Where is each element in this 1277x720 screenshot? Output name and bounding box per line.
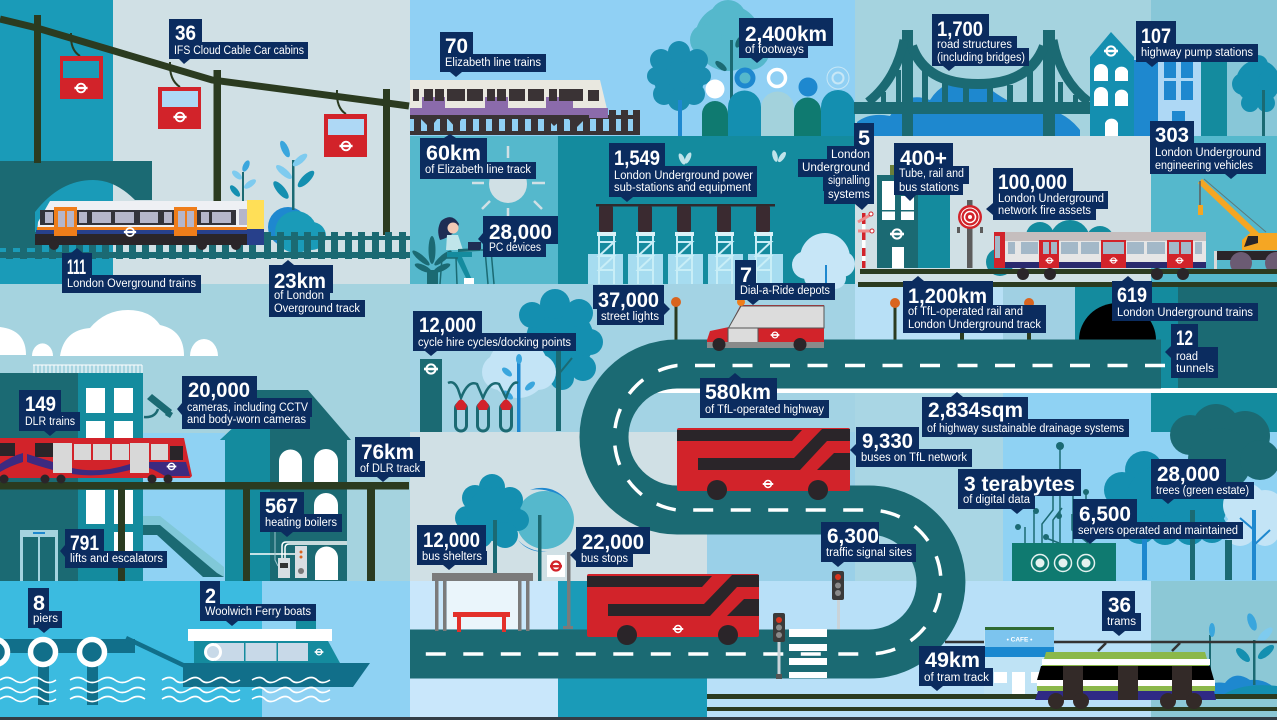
icon: London Overground train bbox=[35, 200, 264, 250]
callout: 23km overground track bbox=[269, 260, 365, 317]
winding road bbox=[410, 364, 1165, 654]
callout: 12 road tunnels: tunnels bbox=[1176, 363, 1214, 375]
callout: 22,000 bus stops: 22,000 bbox=[582, 531, 644, 554]
callout: 2,400km footways: 2,400km bbox=[745, 23, 827, 46]
callout: 111 overground trains: 111 bbox=[67, 256, 86, 279]
callout: 107 highway pump stations bbox=[1136, 21, 1258, 67]
callout: 60km Elizabeth track: of Elizabeth line track bbox=[425, 164, 531, 176]
callout: 1,549 power sub-stations: sub-stations and equipment bbox=[614, 182, 752, 194]
icon: Underground train bbox=[994, 232, 1206, 268]
callout: 400+ stations bbox=[894, 143, 969, 201]
icon: fire hose reel bbox=[957, 200, 983, 268]
callout: 1,700 road structures bbox=[932, 14, 1029, 71]
callout: 7 Dial-a-Ride depots: Dial-a-Ride depots bbox=[740, 285, 830, 297]
icon: plants at tram end bbox=[1200, 612, 1277, 697]
callout: 76km DLR track: 76km bbox=[361, 441, 414, 464]
callout: 22,000 bus stops: bus stops bbox=[581, 553, 628, 565]
callout: 619 Underground trains: London Underground trains bbox=[1117, 307, 1253, 319]
icon: bus shelter bbox=[432, 573, 533, 632]
callout: 70 Elizabeth line trains: Elizabeth line trains bbox=[445, 57, 541, 69]
callout: 5 signalling systems: signalling bbox=[828, 175, 870, 187]
DLR viaduct bbox=[0, 482, 409, 581]
icon: lift bbox=[20, 530, 58, 581]
callout: 1,549 power sub-stations: 1,549 bbox=[614, 147, 660, 170]
callout: 12,000 bus shelters: bus shelters bbox=[422, 551, 482, 563]
icon: cafe building bbox=[984, 627, 1054, 695]
icon: footways trees and people bbox=[647, 0, 855, 136]
callout: 2 Woolwich Ferry boats: Woolwich Ferry boats bbox=[205, 606, 311, 618]
tram rails bbox=[707, 694, 1277, 711]
callout: 5 signalling systems: Underground bbox=[802, 162, 870, 174]
callout: 36 cable car cabins bbox=[169, 19, 308, 64]
icon: suspension bridge bbox=[854, 30, 1090, 136]
callout: 8 piers bbox=[28, 588, 62, 633]
callout: 28,000 trees: 28,000 bbox=[1157, 463, 1220, 486]
callout: 28,000 PC devices: 28,000 bbox=[489, 221, 552, 244]
callout: 2,834sqm drainage: of highway sustainable drainage systems bbox=[927, 423, 1124, 435]
callout: 5 signalling systems: 5 bbox=[858, 127, 870, 150]
icon: traffic light at junction bbox=[832, 571, 844, 629]
callout: 12,000 cycle hire: cycle hire cycles/docking points bbox=[418, 337, 571, 349]
icon: cable car cabin 1 bbox=[60, 33, 103, 99]
callout: 49km tram track: 49km bbox=[925, 649, 980, 672]
callout: 567 heating boilers: 567 bbox=[265, 495, 298, 518]
icon: green estate trees bbox=[1102, 404, 1277, 580]
icon: clouds bbox=[0, 310, 218, 356]
callout: 12 road tunnels: road bbox=[1176, 351, 1198, 363]
callout: 567 heating boilers: heating boilers bbox=[265, 517, 337, 529]
callout: 6,500 servers: 6,500 bbox=[1079, 503, 1131, 526]
icon: bushes behind tube train bbox=[986, 220, 1114, 276]
callout: 60km Elizabeth track bbox=[420, 134, 536, 179]
callout: 1,200km track: London Underground track bbox=[908, 319, 1041, 331]
callout: 37,000 street lights bbox=[593, 285, 670, 325]
callout: 28,000 PC devices: PC devices bbox=[489, 242, 541, 254]
callout: 12,000 bus shelters bbox=[417, 525, 487, 570]
icon: overhead tram wire bbox=[945, 642, 1277, 651]
callout: 76km DLR track bbox=[355, 437, 425, 482]
callout: 580km highway: 580km bbox=[705, 381, 771, 404]
callout: 12 road tunnels bbox=[1165, 324, 1218, 378]
callout: 580km highway: of TfL-operated highway bbox=[705, 404, 824, 416]
callout: 149 DLR trains: 149 bbox=[25, 393, 56, 416]
icon: traffic light near crossing bbox=[773, 613, 785, 679]
callout: 9,330 buses: buses on TfL network bbox=[861, 452, 967, 464]
callout: 2,400km footways: of footways bbox=[745, 44, 804, 56]
callout: 3 terabytes: of digital data bbox=[963, 494, 1031, 506]
callout: 619 Underground trains: 619 bbox=[1117, 284, 1147, 307]
icon: plants and bush beside overground bbox=[228, 139, 326, 253]
callout: 6,500 servers bbox=[1073, 499, 1243, 544]
callout: 791 lifts and escalators bbox=[60, 529, 167, 568]
callout: 791 lifts and escalators: lifts and escalators bbox=[70, 553, 163, 565]
icon: servers with circuit lines bbox=[1012, 442, 1116, 581]
callout: 111 overground trains: London Overground trains bbox=[67, 278, 196, 290]
icon: double-decker bus on TfL network bbox=[677, 428, 850, 500]
callout: 2 Woolwich Ferry boats: 2 bbox=[205, 585, 216, 608]
callout: 6,300 traffic signals bbox=[821, 522, 916, 567]
callout: 28,000 trees: trees (green estate) bbox=[1156, 485, 1249, 497]
callout: 36 trams: 36 bbox=[1108, 594, 1131, 617]
callout: 580km highway bbox=[700, 373, 829, 418]
icon: DLR tower building bbox=[0, 365, 143, 581]
callout: 1,700 road structures: 1,700 bbox=[937, 18, 983, 41]
callout: 3 terabytes bbox=[958, 469, 1081, 514]
icon: townhouses beside pump stations bbox=[1090, 29, 1277, 136]
icon: bus stop pole and sign bbox=[547, 552, 573, 629]
icon: cable car cabin 3 bbox=[324, 90, 367, 157]
icon: house with arched windows bbox=[220, 390, 351, 581]
callout: 6,500 servers: servers operated and maintained bbox=[1078, 525, 1238, 537]
cable car line with towers bbox=[0, 15, 409, 235]
icon: crane bbox=[1198, 179, 1277, 274]
callout: 1,200km track: of TfL-operated rail and bbox=[908, 306, 1023, 318]
icon: Woolwich ferry bbox=[183, 621, 370, 687]
callout: 60km Elizabeth track: 60km bbox=[426, 142, 481, 165]
callout: 23km overground track: 23km bbox=[274, 270, 326, 293]
callout: 23km overground track: Overground track bbox=[274, 303, 360, 315]
callout: 22,000 bus stops bbox=[570, 527, 650, 567]
callout: 20,000 cameras bbox=[177, 376, 312, 429]
callout: 1,700 road structures: (including bridges) bbox=[937, 52, 1025, 64]
callout: 2 Woolwich Ferry boats bbox=[200, 581, 316, 626]
callout: 8 piers: 8 bbox=[33, 592, 45, 615]
white kerb highlight bbox=[655, 388, 1277, 393]
callout: 100,000 fire assets: network fire assets bbox=[998, 205, 1091, 217]
callout: 49km tram track: of tram track bbox=[924, 672, 989, 684]
icon: waves bbox=[0, 678, 330, 702]
callout: 12 road tunnels: 12 bbox=[1176, 327, 1193, 350]
callout: 107 highway pump stations: highway pump stations bbox=[1141, 47, 1253, 59]
callout: 9,330 buses bbox=[850, 427, 972, 467]
icon: railway arch bridge bbox=[0, 161, 152, 248]
callout: 36 cable car cabins: IFS Cloud Cable Car cabins bbox=[174, 45, 304, 57]
callout: 5 signalling systems: London bbox=[831, 149, 870, 161]
callout: 2,400km footways bbox=[739, 18, 833, 63]
icon: CCTV camera bbox=[144, 394, 173, 418]
callout: 5 signalling systems bbox=[798, 123, 874, 210]
callout: 20,000 cameras: 20,000 bbox=[188, 379, 250, 402]
callout: 12,000 bus shelters: 12,000 bbox=[423, 529, 480, 552]
callout: 1,200km track bbox=[903, 276, 1046, 333]
icon: street lights bbox=[671, 297, 1034, 340]
icon: zebra crossing bbox=[789, 629, 827, 678]
callout: 5 signalling systems: systems bbox=[828, 189, 870, 201]
icon: light shrub at end of sub-station panel bbox=[792, 233, 855, 289]
icon: signal post bbox=[858, 212, 874, 268]
rail line under tube train bbox=[858, 269, 1277, 287]
callout: 400+ stations: bus stations bbox=[899, 182, 959, 194]
icon: tube train wheels bbox=[1017, 268, 1189, 280]
callout: 23km overground track: of London bbox=[274, 290, 324, 302]
icon: escalator bbox=[143, 516, 224, 577]
icon: Dial-a-Ride van bbox=[707, 298, 824, 351]
callout: 567 heating boilers bbox=[260, 492, 342, 537]
icon: cycle hire trees bbox=[482, 289, 603, 432]
callout: 20,000 cameras: and body-worn cameras bbox=[187, 414, 306, 426]
callout: 37,000 street lights: 37,000 bbox=[598, 289, 659, 312]
icon: cable car cabin 2 bbox=[158, 62, 201, 129]
callout: 37,000 street lights: street lights bbox=[601, 311, 659, 323]
callout: 2,834sqm drainage bbox=[922, 392, 1129, 437]
callout: 400+ stations: 400+ bbox=[900, 147, 947, 170]
icon: tram bbox=[1035, 652, 1216, 709]
icon: heating boiler pipes bbox=[249, 532, 347, 578]
callout: 70 Elizabeth line trains: 70 bbox=[445, 35, 468, 58]
icon: trees behind bus shelter bbox=[455, 474, 574, 581]
callout: 1,549 power sub-stations bbox=[609, 143, 757, 202]
callout: 303 engineering vehicles: London Underground bbox=[1155, 147, 1261, 159]
callout: 49km tram track bbox=[919, 646, 993, 691]
callout: 149 DLR trains bbox=[19, 390, 80, 436]
icon: cafe building: • CAFE • bbox=[1007, 636, 1033, 644]
callout: 20,000 cameras: cameras, including CCTV bbox=[187, 402, 308, 414]
callout: 100,000 fire assets bbox=[986, 168, 1108, 220]
icon: station building bbox=[877, 165, 950, 268]
callout: 107 highway pump stations: 107 bbox=[1141, 25, 1171, 48]
callout: 400+ stations: Tube, rail and bbox=[899, 168, 964, 180]
icon: power sub-stations bbox=[588, 150, 787, 284]
callout: 111 overground trains bbox=[62, 248, 201, 293]
callout: 303 engineering vehicles bbox=[1150, 121, 1266, 179]
callout: 28,000 trees bbox=[1151, 459, 1254, 504]
callout: 791 lifts and escalators: 791 bbox=[70, 532, 99, 555]
icon: double-decker bus at stop bbox=[587, 574, 759, 645]
overground railway track bbox=[0, 232, 410, 259]
callout: 303 engineering vehicles: 303 bbox=[1155, 124, 1189, 147]
icon: Elizabeth line track bbox=[410, 110, 640, 135]
callout: 3 terabytes: 3 terabytes bbox=[964, 473, 1075, 496]
callout: 12,000 cycle hire bbox=[413, 311, 576, 356]
callout: 9,330 buses: 9,330 bbox=[862, 430, 913, 453]
callout: 36 trams: trams bbox=[1107, 616, 1136, 628]
icon: DLR train bbox=[0, 438, 192, 484]
callout: 1,549 power sub-stations: London Underground power bbox=[614, 170, 753, 182]
icon: Elizabeth line train bbox=[410, 80, 608, 128]
callout: 7 Dial-a-Ride depots: 7 bbox=[740, 264, 752, 287]
callout: 2,834sqm drainage: 2,834sqm bbox=[928, 399, 1023, 422]
callout: 1,200km track: 1,200km bbox=[908, 285, 987, 308]
callout: 7 Dial-a-Ride depots bbox=[735, 260, 835, 305]
icon: tunnel mouth bbox=[1079, 303, 1156, 340]
callout: 28,000 PC devices bbox=[478, 216, 558, 257]
callout: 70 Elizabeth line trains bbox=[440, 32, 546, 77]
callout: 8 piers: piers bbox=[33, 613, 58, 625]
callout: 6,300 traffic signals: 6,300 bbox=[827, 525, 879, 548]
callout: 149 DLR trains: DLR trains bbox=[25, 416, 75, 428]
icon: PC user with sun and plant bbox=[411, 146, 545, 284]
callout: 303 engineering vehicles: engineering vehicles bbox=[1155, 160, 1253, 172]
callout: 1,700 road structures: road structures bbox=[937, 39, 1012, 51]
callout: 100,000 fire assets: 100,000 bbox=[998, 171, 1067, 194]
callout: 100,000 fire assets: London Underground bbox=[998, 193, 1104, 205]
icon: cycle hire docking station bbox=[420, 359, 518, 432]
callout: 6,300 traffic signals: traffic signal sites bbox=[826, 547, 912, 559]
callout: 76km DLR track: of DLR track bbox=[360, 463, 420, 475]
callout: 36 trams bbox=[1102, 591, 1141, 636]
callout: 36 cable car cabins: 36 bbox=[175, 22, 196, 45]
callout: 12,000 cycle hire: 12,000 bbox=[419, 314, 476, 337]
callout: 619 Underground trains bbox=[1112, 276, 1258, 321]
icon: pier with rings bbox=[0, 636, 186, 705]
